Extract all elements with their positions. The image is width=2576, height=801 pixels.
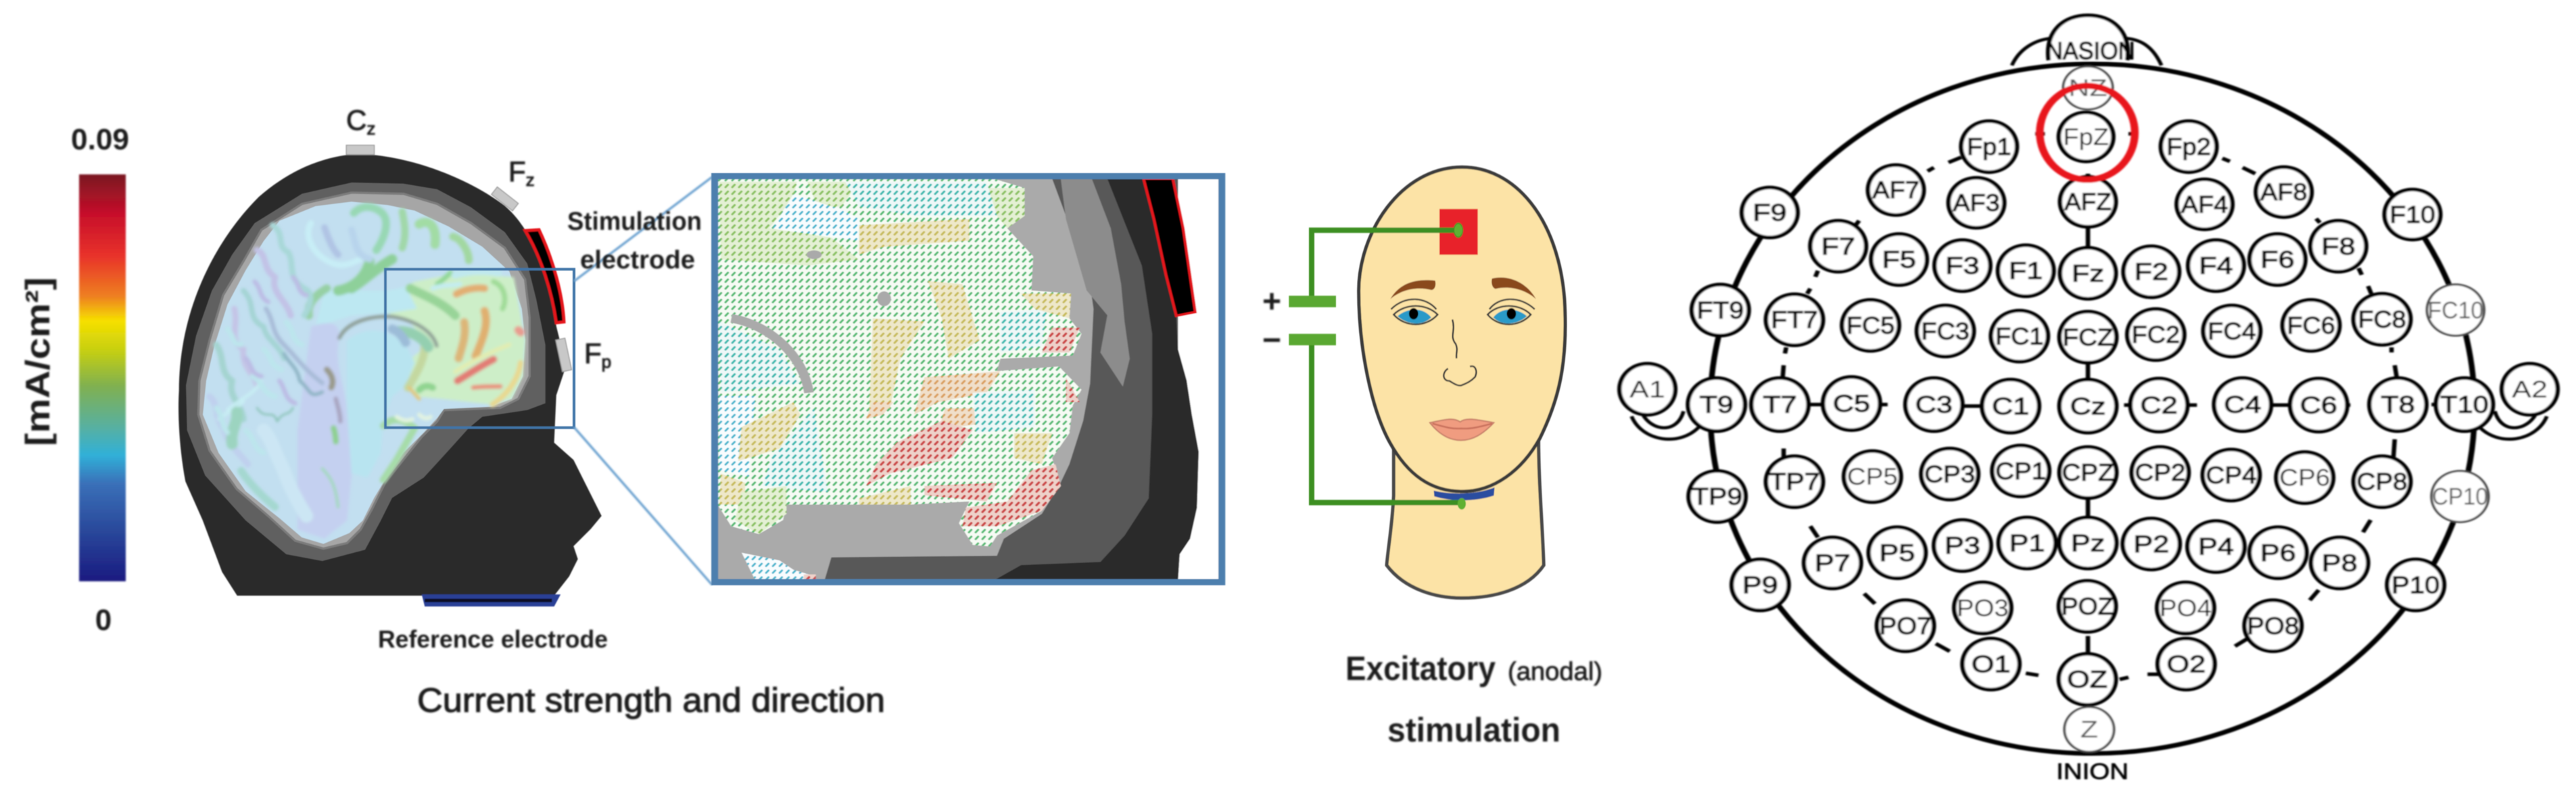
electrodes parieto-occipital row: PO3 [1957,596,2009,621]
electrode Nz [2064,66,2113,110]
electrodes central row: Cz [2070,394,2105,420]
electrodes centro-parietal row: CPZ [2062,460,2114,486]
electrodes parieto-occipital row [1877,581,2301,652]
brain regional colour [210,207,525,539]
electrodes fronto-central row [1692,285,2410,363]
electrodes central row: T7 [1763,392,1797,418]
electrodes frontal row: F5 [1882,247,1916,273]
colour bar minimum value: 0 [95,604,112,637]
electrodes frontal row: F7 [1821,234,1855,260]
battery positive sign: + [1262,284,1281,320]
nose [1444,320,1476,385]
electrodes prefrontal row: Fp2 [2166,135,2211,160]
electrodes fronto-central row: FC4 [2208,319,2256,345]
electrodes parietal row: P6 [2260,541,2296,566]
label Cz: C [346,104,366,136]
electrodes fronto-central row: FCZ [2063,325,2114,351]
label Fz: z [526,170,535,190]
colour bar legend [19,123,129,637]
cerebrospinal fluid layer [198,193,529,549]
brain current map [186,183,574,561]
inset skin layer [993,178,1199,581]
head [1359,167,1565,491]
electrodes parietal row: P5 [1880,541,1915,566]
electrodes frontal row: F8 [2321,234,2356,260]
electrodes central row: C6 [2300,393,2337,418]
electrodes frontal row: F1 [2009,258,2043,285]
inset frame [715,176,1222,582]
neck [1387,438,1544,598]
sagittal head silhouette [178,145,602,606]
electrodes fronto-central row: FT9 [1697,298,1744,324]
electrodes frontal row: F6 [2260,247,2295,273]
colour bar maximum value: 0.09 [71,123,129,156]
electrodes central row: T10 [2440,392,2489,418]
anodal stimulation head diagram [1289,167,1565,598]
electrodes parieto-occipital row: PO8 [2247,614,2299,639]
caption excitatory anodal stimulation: stimulation [1387,711,1560,749]
electrodes centro-parietal row: CP5 [1847,464,1898,490]
electrodes frontal row [1742,187,2440,299]
corpus callosum and ventricle [399,331,428,347]
enlarged inset of frontal cortex [715,176,1224,582]
nasion label: NASION [2046,37,2135,65]
electrodes parietal row: P9 [1742,573,1778,598]
electrodes occipital row: O2 [2167,652,2205,677]
label reference electrode: Reference electrode [378,625,608,653]
electrodes frontal row: F4 [2199,253,2233,279]
electrodes centro-parietal row: CP1 [1995,459,2046,485]
electrodes prefrontal row: Fp1 [1967,135,2011,160]
electrode Iz [2064,707,2114,752]
electrodes parieto-occipital row: PO7 [1880,614,1932,639]
posterior gyri [272,225,310,316]
electrodes central row: T8 [2381,392,2415,418]
electrodes fronto-central row: FC1 [1995,324,2044,349]
inset stimulation electrode [1143,178,1195,316]
zoom region box [385,269,574,428]
colour bar unit label: [mA/cm²] [19,277,57,446]
caption excitatory anodal stimulation [1345,650,1602,749]
electrode marker Cz [346,145,375,155]
head model labels [346,104,885,719]
electrode CP10: CP10 [2432,484,2488,510]
electrodes prefrontal row: FpZ [2064,124,2109,151]
electrodes centro-parietal row: CP4 [2206,463,2257,489]
electrode FC10 [2427,285,2484,335]
right eyebrow [1492,278,1536,299]
colour scale bar [79,174,126,581]
electrodes central row: A1 [1629,377,1665,403]
electrodes central row: C4 [2224,392,2261,418]
electrodes parietal row: P7 [1815,551,1851,577]
electrodes central row: C3 [1915,392,1953,418]
label Fp: F [584,337,602,369]
nasion bumps [2012,16,2162,66]
blue cathode pad [1434,487,1495,500]
specks in lower frontal [397,414,431,420]
electrodes frontal row: Fz [2072,261,2104,287]
electrodes parietal row: P2 [2134,532,2169,558]
electrodes central row: C1 [1992,394,2029,420]
electrodes centro-parietal row: TP9 [1692,484,1742,510]
electrodes parieto-occipital row: POZ [2061,594,2114,620]
electrodes occipital row: OZ [2067,667,2107,693]
electrodes frontal row: F2 [2134,260,2168,285]
electrodes centro-parietal row [1689,445,2410,522]
ear arcs [1631,411,2547,439]
label Cz: z [366,118,375,139]
electrodes centro-parietal row: CP2 [2135,460,2186,486]
electrodes parietal row: Pz [2071,531,2105,556]
scalp outline [1710,64,2475,754]
electrodes centro-parietal row: CP3 [1924,462,1975,487]
battery plates [1289,296,1336,345]
electrode Iz: Z [2080,717,2098,743]
anodal diagram labels [1262,284,1602,749]
label stimulation electrode second line: electrode [580,246,695,274]
left eyebrow [1390,280,1435,299]
caption excitatory anodal stimulation: (anodal) [1508,658,1602,686]
caption current strength and direction: Current strength and direction [417,681,885,719]
electrodes frontal row: F3 [1945,253,1980,279]
electrode CP10 [2431,471,2489,522]
inset white background past head [1173,178,1224,581]
electrodes occipital row [1962,639,2215,705]
label stimulation electrode: Stimulation [567,208,702,236]
electrode FC10: FC10 [2428,298,2483,324]
electrodes anterior frontal row: AF4 [2181,192,2228,218]
inset bone band [1061,178,1130,387]
label Fp: p [602,351,611,372]
inset light grey CSF ground [717,178,1221,581]
electrodes frontal row: F9 [1752,200,1787,226]
frontal current hot spots [456,288,485,294]
stimulation electrode on scalp [525,230,564,323]
electrodes frontal row: F10 [2389,202,2435,228]
electrodes fronto-central row: FC8 [2358,307,2406,333]
electrodes anterior frontal row: AF3 [1953,191,2000,216]
inset skull layer [824,178,1178,581]
electrodes centro-parietal row: TP7 [1769,470,1820,495]
skull layer [186,183,546,561]
electrodes parietal row: P1 [2009,531,2045,556]
electrodes prefrontal row [1961,112,2216,172]
electrodes central row: C5 [1833,391,1870,417]
gyri chain along top [354,207,386,250]
electrodes fronto-central row: FC3 [1922,319,1970,345]
reference electrode under head [422,594,560,606]
electrodes parieto-occipital row: PO4 [2160,596,2212,621]
electrodes occipital row: O1 [1972,652,2010,677]
electrodes central row: A2 [2512,377,2548,403]
red highlight ring around FpZ [2040,86,2135,180]
EEG 10-10 electrode map [1619,16,2558,784]
electrode marker Fz [492,187,519,211]
inset cortex with current vectors [717,178,1081,581]
electrodes parietal row: P3 [1945,533,1980,559]
electrodes centro-parietal row: CP8 [2357,470,2408,495]
label Fz: F [508,155,526,187]
electrode Nz: NZ [2068,76,2107,101]
electrodes fronto-central row: FC2 [2132,322,2180,348]
red anode pad [1439,209,1478,255]
electrodes anterior frontal row [1868,165,2312,229]
circuit wires [1312,223,1466,510]
right eye [1487,299,1535,324]
brain surface [203,201,525,544]
inion label: INION [2056,758,2128,784]
electrodes anterior frontal row: AF7 [1872,178,1919,203]
electrodes parietal row [1732,518,2444,610]
caption excitatory anodal stimulation: Excitatory [1345,650,1496,687]
electrodes anterior frontal row: AF8 [2260,180,2308,205]
connector lines from small box to inset [574,177,712,585]
electrode connectors [1750,134,2438,679]
electrodes central row: T9 [1700,392,1734,418]
electrodes parietal row: P8 [2322,551,2358,577]
mouth [1430,419,1494,440]
electrodes fronto-central row: FC5 [1846,313,1894,339]
battery negative sign: − [1262,322,1281,358]
electrodes central row [1619,364,2558,433]
electrodes parietal row: P4 [2198,535,2234,560]
electrodes fronto-central row: FC6 [2287,313,2335,339]
electrodes fronto-central row: FT7 [1771,308,1818,333]
electrodes anterior frontal row: AFZ [2064,189,2112,216]
left eye [1391,299,1437,324]
electrodes centro-parietal row: CP6 [2279,465,2330,491]
electrode marker Fp [556,338,572,372]
electrodes central row: C2 [2141,393,2178,418]
skin outline [178,154,602,596]
electrodes parietal row: P10 [2391,573,2439,598]
